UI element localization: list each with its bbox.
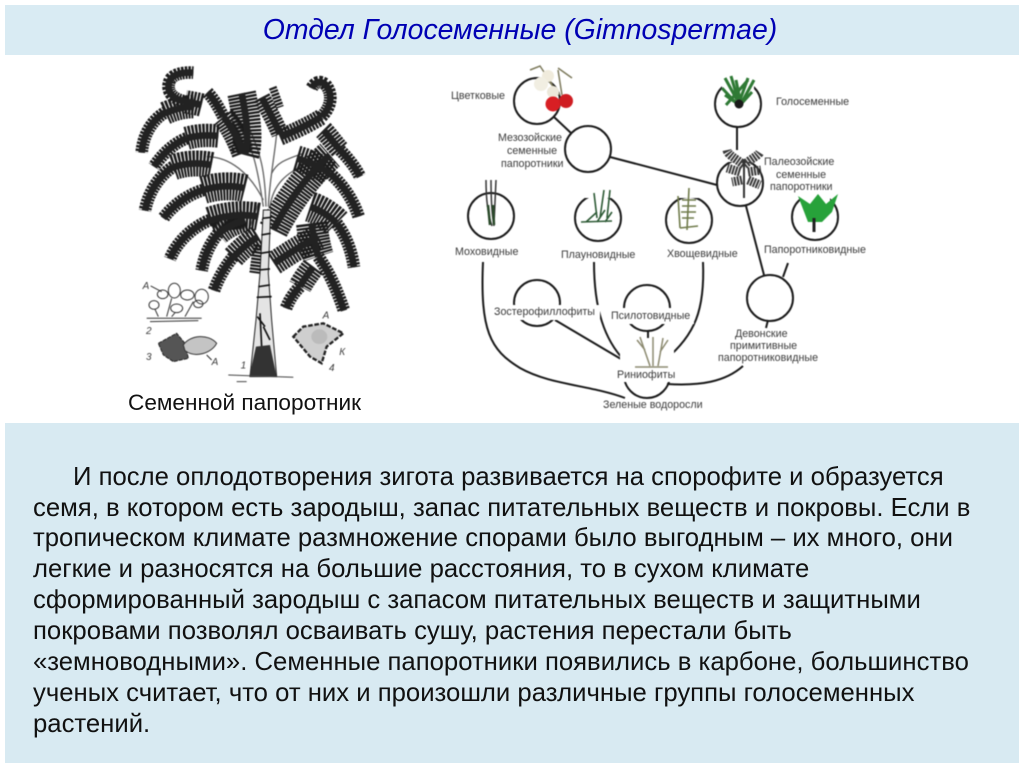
diagram labels: Зостерофиллофиты: [494, 306, 595, 318]
detail labels: А: [322, 310, 330, 321]
frond midribs: [142, 73, 360, 311]
diagram labels: Папоротниковидные: [764, 244, 866, 256]
detail labels: 2: [145, 326, 152, 337]
icon: conifer: [722, 76, 754, 108]
body paragraph: ученых считает, что от них и произошли различные группы голосеменных: [33, 679, 914, 707]
diagram labels: Мезозойские: [498, 132, 562, 144]
detail labels: 4: [329, 363, 335, 374]
diagram labels: Псилотовидные: [611, 310, 690, 322]
body paragraph: покровами позволял осваивать сушу, растения перестали быть: [33, 617, 792, 645]
diagram labels: папоротники: [501, 158, 564, 170]
title bar: [5, 5, 1019, 55]
diagram labels: Хвощевидные: [667, 248, 738, 260]
body paragraph: растений.: [33, 710, 150, 738]
body paragraph: «земноводными». Семенные папоротники появились в карбоне, большинство: [33, 648, 969, 676]
detail labels: 3: [146, 352, 152, 363]
connecting lines: [482, 117, 788, 398]
detail figure 2: [147, 283, 208, 322]
icon: moss: [486, 180, 496, 226]
diagram labels: Риниофиты: [617, 369, 675, 381]
detail labels: А: [142, 281, 150, 292]
diagram labels: Цветковые: [451, 90, 505, 102]
diagram labels: Девонские: [735, 328, 788, 340]
diagram labels: Зеленые водоросли: [603, 399, 703, 411]
diagram labels: Голосеменные: [776, 96, 849, 108]
detail figure 4: [293, 323, 343, 363]
diagram labels: папоротники: [770, 181, 833, 193]
diagram labels: папоротниковидные: [718, 352, 818, 364]
narrow tips: [142, 73, 360, 311]
icon: horsetail: [678, 188, 698, 230]
body paragraph: семя, в котором есть зародыш, запас питательных веществ и покровы. Если в: [33, 494, 970, 522]
label masks: [470, 78, 830, 382]
body paragraph: сформированный зародыш с запасом питательных веществ и защитными: [33, 586, 921, 614]
icon: rhyniophyte: [635, 337, 668, 367]
detail labels: А: [211, 357, 219, 368]
detail figure 3: [158, 333, 217, 362]
diagram labels: семенные: [507, 145, 557, 157]
frond bodies: [165, 87, 340, 287]
icon: fern: [798, 194, 838, 232]
body paragraph: И после оплодотворения зигота развивается на спорофите и образуется: [73, 463, 944, 491]
diagram labels: Палеозойские: [764, 156, 834, 168]
diagram labels: Моховидные: [455, 246, 518, 258]
detail labels: К: [339, 347, 346, 358]
text panel: [5, 423, 1019, 763]
node circles: [468, 78, 838, 398]
diagram labels: Плауновидные: [561, 249, 635, 261]
detail labels: 1: [241, 360, 246, 371]
diagram labels: семенные: [776, 169, 826, 181]
caption: Семенной папоротник: [128, 390, 361, 415]
trunk: [228, 210, 293, 382]
fronds: [142, 73, 360, 311]
stems: [207, 123, 307, 237]
title: Отдел Голосеменные (Gimnospermae): [263, 14, 777, 46]
diagram labels: [451, 90, 866, 411]
body paragraph: [33, 463, 970, 738]
icon: flowers and cherries: [530, 66, 573, 112]
diagram labels: примитивные: [730, 340, 797, 352]
body paragraph: легкие и разносятся на большие расстояния, то в сухом климате: [33, 555, 809, 583]
detail labels: [142, 281, 346, 374]
icon: club moss: [581, 190, 612, 222]
icon: paleozoic seed fern: [727, 150, 761, 198]
body paragraph: тропическом климате размножение спорами было выгодным – их много, они: [33, 524, 953, 552]
